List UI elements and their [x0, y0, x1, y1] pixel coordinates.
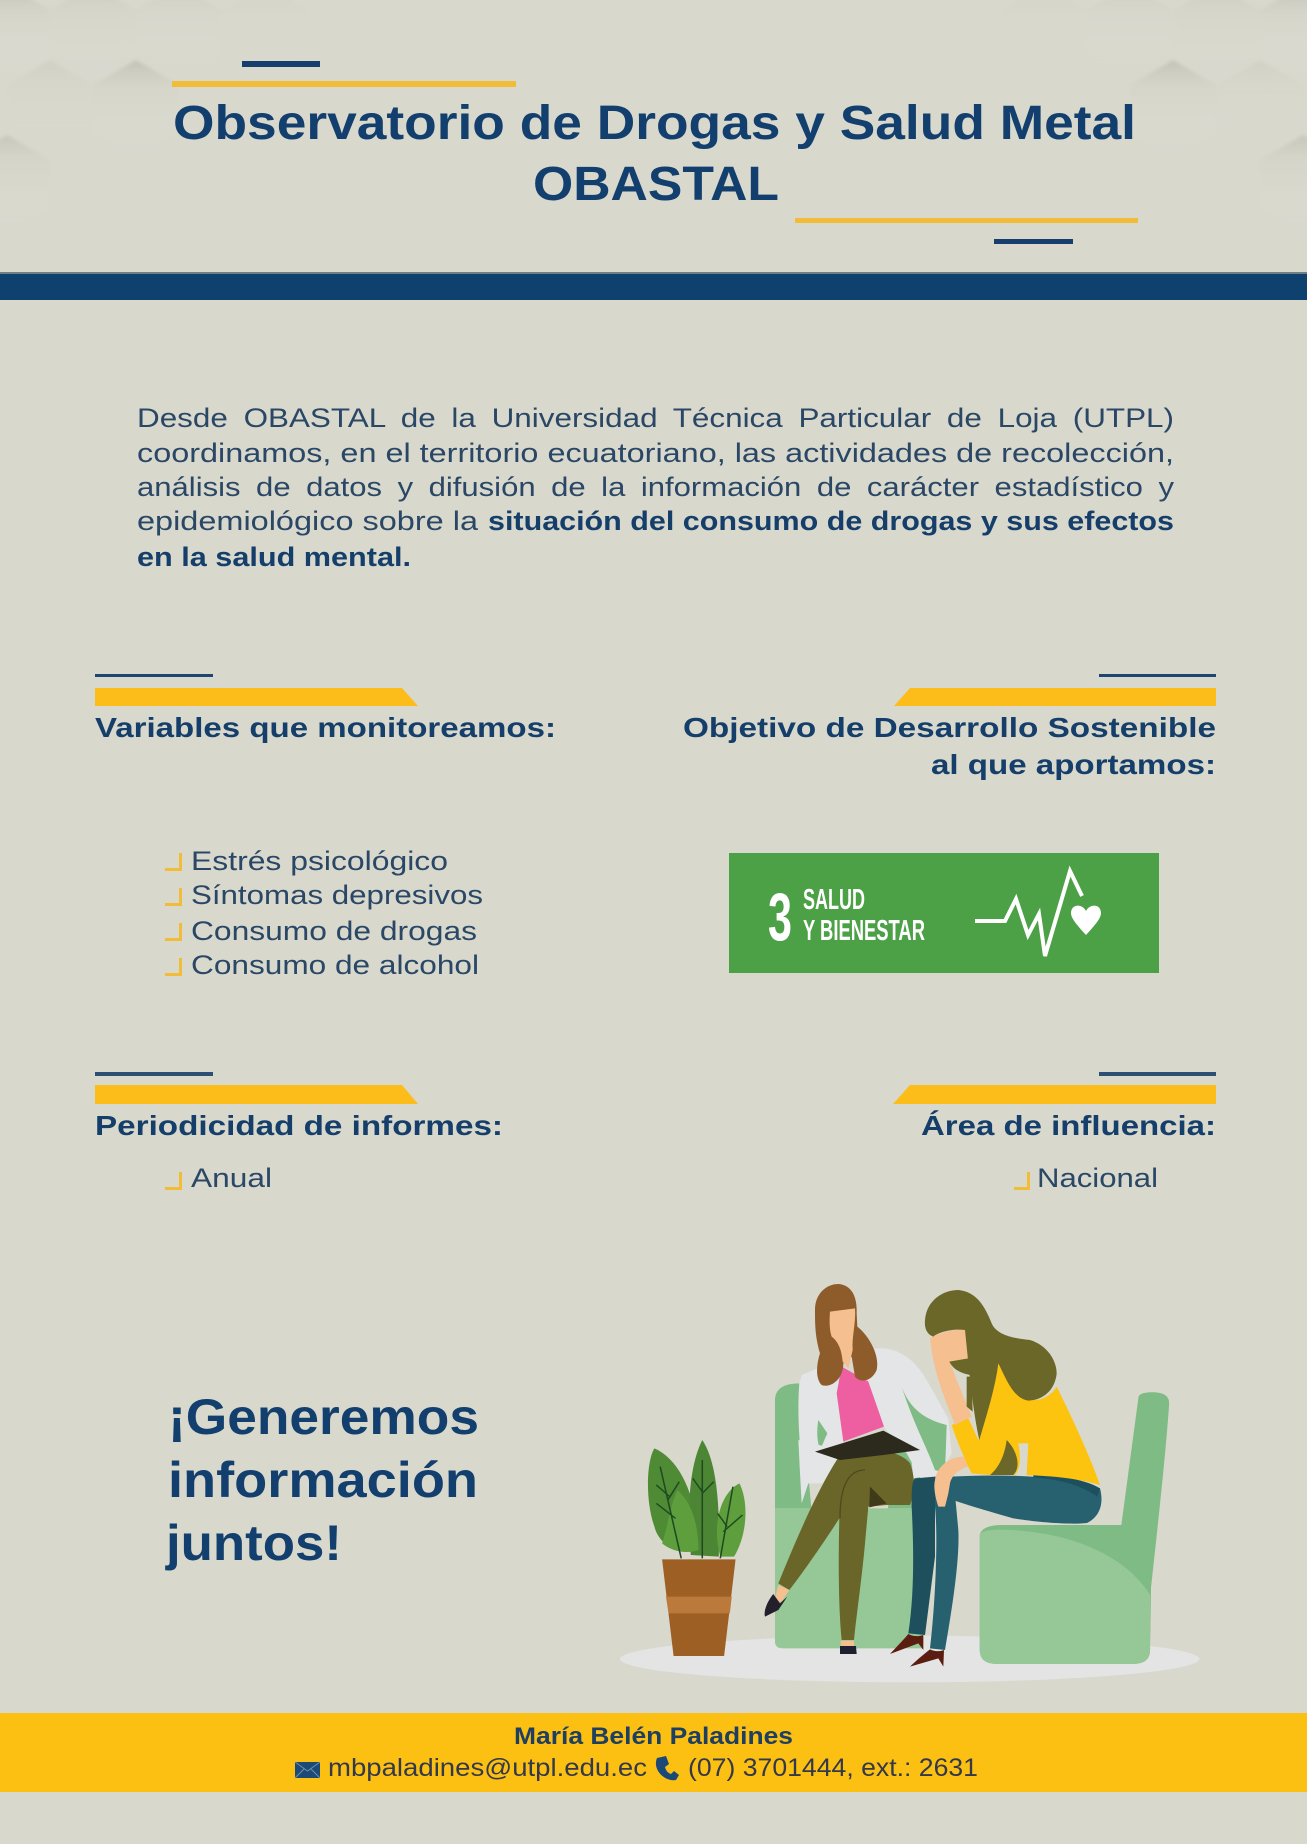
section ribbon [893, 1072, 1216, 1104]
title accent bars bottom [795, 218, 1138, 244]
SDG 3 badge [729, 853, 1159, 973]
icon: phone [656, 1756, 679, 1780]
intro paragraph: epidemiológico sobre la [137, 506, 479, 536]
background: honeycomb pattern top right [1001, 0, 1307, 235]
contact email: mbpaladines@utpl.edu.ec [328, 1754, 647, 1782]
call to action: información [168, 1452, 478, 1508]
SDG 3 badge: 3 [768, 879, 792, 955]
woman with white coat: legs [765, 1440, 932, 1654]
section ribbon [95, 1072, 418, 1104]
tablet on lap [815, 1431, 920, 1460]
intro paragraph [137, 403, 1175, 572]
panel: area de influencia [893, 1072, 1216, 1193]
intro paragraph: análisis de datos y difusión de la información de carácter estadístico y [137, 472, 1175, 502]
SDG 3 badge: Y BIENESTAR [803, 915, 925, 947]
list item [165, 1163, 272, 1193]
intro paragraph: Desde OBASTAL de la Universidad Técnica Particular de Loja (UTPL) [137, 403, 1174, 433]
intro paragraph: situación del consumo de drogas y sus efectos [488, 506, 1174, 536]
call to action [165, 1389, 479, 1571]
title line 2: OBASTAL [533, 158, 779, 211]
panel: periodicidad [95, 1072, 503, 1193]
footer contact bar [0, 1713, 1307, 1792]
contact name: María Belén Paladines [514, 1723, 793, 1750]
contact phone: (07) 3701444, ext.: 2631 [688, 1754, 978, 1782]
header band [0, 272, 1307, 300]
call to action: ¡Generemos [168, 1389, 479, 1445]
section heading: Área de influencia: [921, 1110, 1216, 1141]
title block [172, 61, 1138, 244]
SDG 3 badge: SALUD [803, 884, 865, 916]
list item: Consumo de alcohol [191, 950, 479, 980]
section heading: al que aportamos: [931, 749, 1216, 780]
call to action: juntos! [165, 1515, 342, 1571]
title line 1: Observatorio de Drogas y Salud Metal [173, 97, 1136, 150]
list item: Anual [191, 1163, 272, 1193]
section heading: Periodicidad de informes: [95, 1110, 503, 1141]
title accent bars top [172, 61, 516, 87]
woman with yellow sweater: lower legs [890, 1477, 959, 1667]
plant in pot [648, 1440, 745, 1656]
section heading: Variables que monitoreamos: [95, 712, 556, 743]
list item: Consumo de drogas [191, 916, 477, 946]
floor shadow [620, 1636, 1199, 1682]
section ribbon [894, 674, 1216, 706]
panel: variables [95, 674, 556, 980]
woman with white coat: upper body [798, 1284, 952, 1483]
illustration: two women talking on chairs [620, 1284, 1199, 1682]
list item: Estrés psicológico [191, 846, 448, 876]
icon: heartbeat and heart [975, 871, 1101, 956]
icon: envelope [295, 1762, 320, 1778]
intro paragraph: en la salud mental. [137, 542, 411, 572]
section ribbon [95, 674, 418, 706]
list item: Síntomas depresivos [191, 880, 483, 910]
background: honeycomb pattern top left [0, 0, 308, 235]
right chair [980, 1392, 1169, 1664]
section heading: Objetivo de Desarrollo Sostenible [683, 712, 1216, 743]
left chair [775, 1383, 949, 1648]
woman with yellow sweater: upper body [925, 1290, 1101, 1524]
intro paragraph: coordinamos, en el territorio ecuatoriano, las actividades de recolección, [137, 438, 1174, 468]
panel: objetivo de desarrollo sostenible [683, 674, 1216, 973]
section heading [683, 712, 1216, 780]
list item: Nacional [1037, 1163, 1158, 1193]
